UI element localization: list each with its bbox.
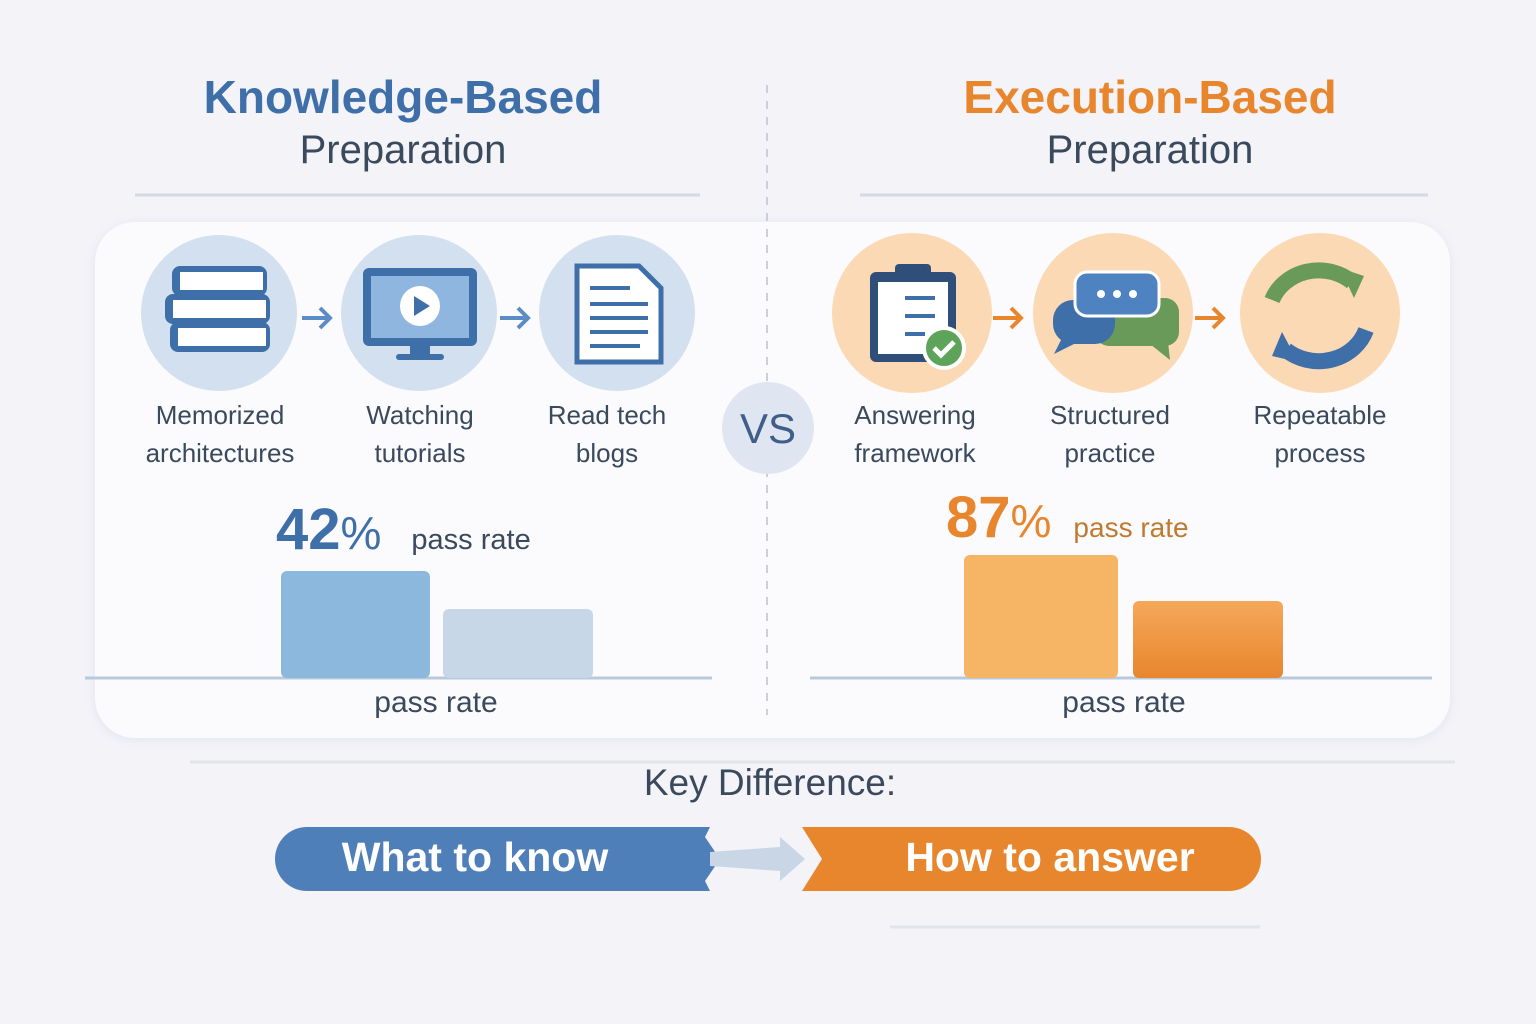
- text: blogs: [576, 438, 638, 468]
- bar chart: execution: [964, 555, 1283, 678]
- text: Repeatable: [1254, 400, 1386, 430]
- title: knowledge-based: Knowledge-Based: [204, 71, 602, 123]
- title: knowledge-based: [204, 71, 602, 172]
- text: Watching: [366, 400, 474, 430]
- text: practice: [1064, 438, 1156, 468]
- labels: execution: Answering: [854, 400, 976, 430]
- panel: main white card: [95, 222, 1450, 738]
- icon: chat bubbles: [1033, 233, 1193, 393]
- stat: 87%: 87% pass rate: [946, 485, 1189, 550]
- axis label right: pass rate: [1062, 686, 1186, 719]
- text: Read tech: [548, 400, 666, 430]
- icon: books: [141, 235, 297, 391]
- stat: 42%: 42% pass rate: [276, 497, 531, 562]
- labels: knowledge: Memorized: [156, 400, 284, 430]
- icon: monitor: [341, 235, 497, 391]
- title: execution-based: [963, 71, 1337, 172]
- labels: execution: [854, 400, 976, 468]
- icon: clipboard: [832, 233, 992, 393]
- axis label left: pass rate: [374, 686, 498, 719]
- title: execution-based: Preparation: [1047, 128, 1253, 172]
- labels: knowledge: architectures: [146, 438, 294, 468]
- pill: how to answer: How to answer: [905, 834, 1195, 880]
- icon: cycle: [1240, 233, 1400, 393]
- vs badge: VS: [740, 405, 796, 452]
- heading: key difference: Key Difference:: [644, 762, 896, 803]
- text: What to know: [342, 834, 608, 880]
- text: Structured: [1050, 400, 1170, 430]
- vs badge: [722, 382, 814, 474]
- icon: document: [539, 235, 695, 391]
- title: execution-based: Execution-Based: [963, 71, 1337, 123]
- labels: knowledge: [146, 400, 294, 468]
- title: knowledge-based: Preparation: [300, 128, 506, 172]
- labels: execution: framework: [854, 438, 976, 468]
- text: process: [1274, 438, 1366, 468]
- pill: what to know: [275, 827, 1261, 891]
- arrow: [302, 308, 330, 328]
- text: tutorials: [374, 438, 466, 468]
- bar chart: knowledge: [281, 571, 593, 678]
